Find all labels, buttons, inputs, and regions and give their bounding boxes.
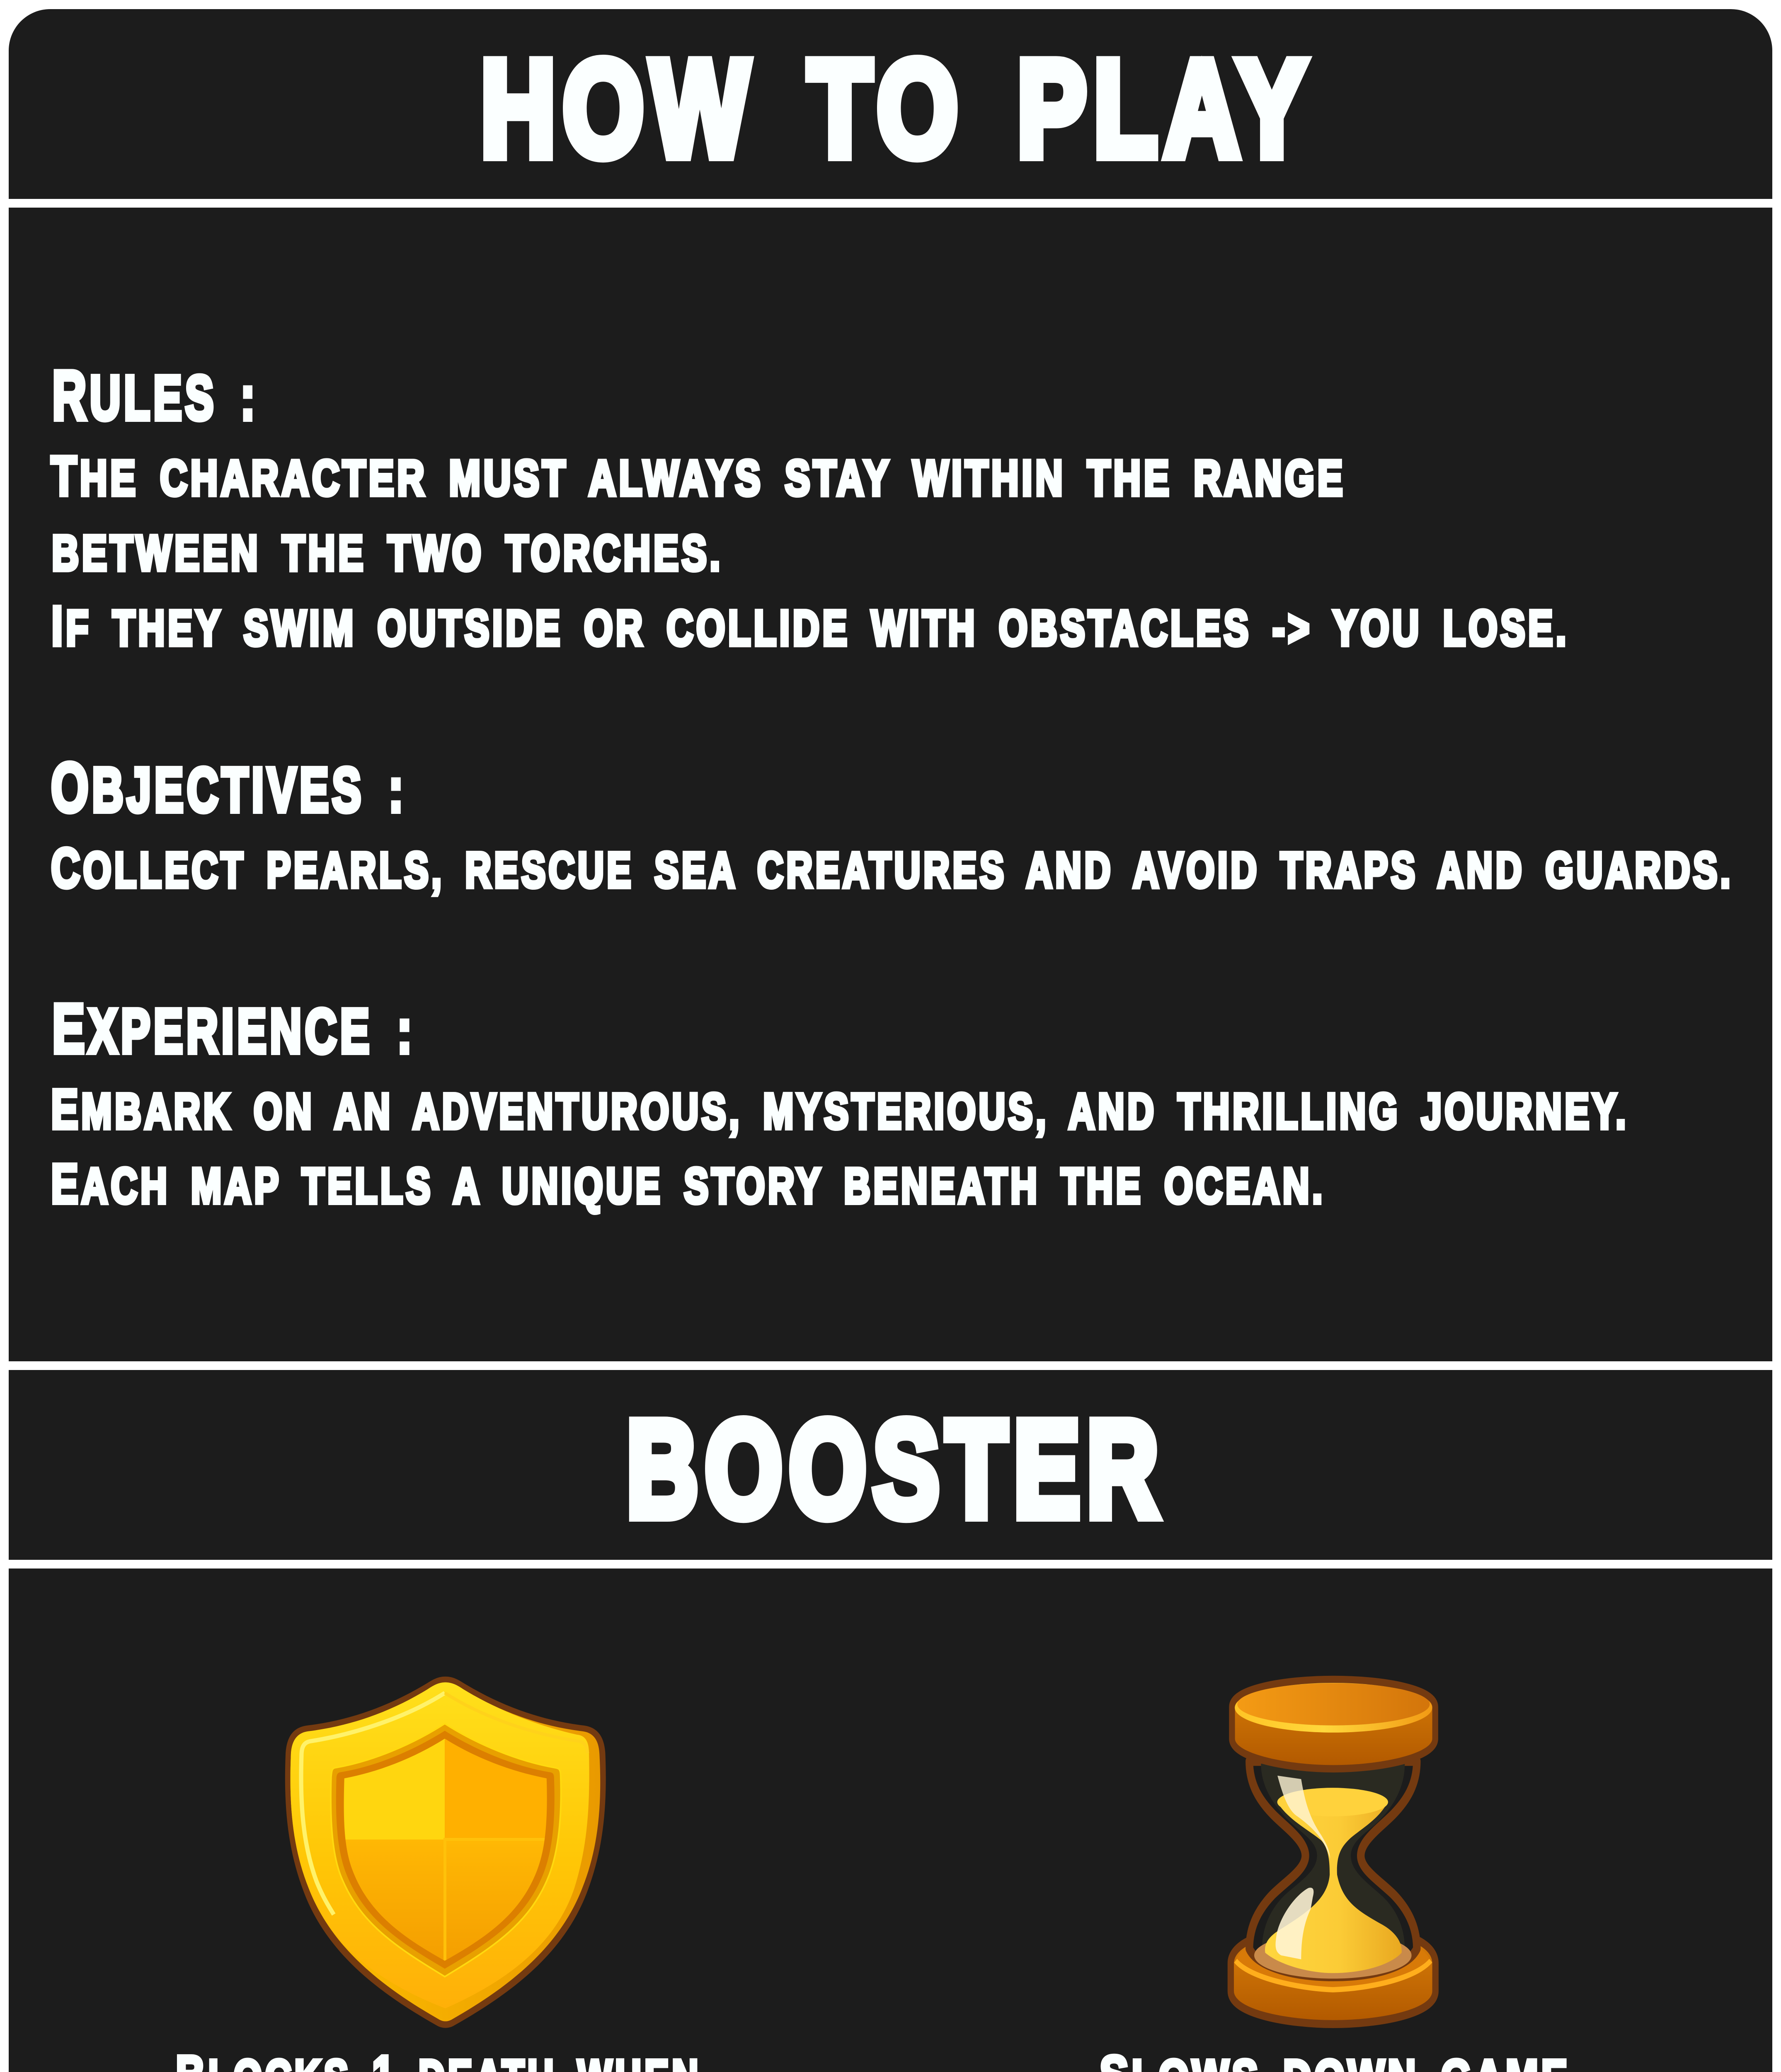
heading: objectives: OBJECTIVES : <box>51 748 407 826</box>
title: how to play: HOW TO PLAY <box>481 32 1314 184</box>
heading: rules: RULES : <box>52 356 258 434</box>
heading: booster: BOOSTER <box>627 1393 1166 1545</box>
panel: booster list <box>9 1569 1772 2072</box>
text block: rules <box>51 445 1569 657</box>
text block: experience: EACH MAP TELLS A UNIQUE STORY BENEATH THE OCEAN. <box>51 1152 1325 1215</box>
text block: rules: THE CHARACTER MUST ALWAYS STAY WITHIN THE RANGE <box>51 445 1346 507</box>
heading: experience: EXPERIENCE : <box>52 990 415 1067</box>
text block: experience <box>51 1078 1629 1215</box>
panel: how to play header <box>9 9 1772 199</box>
icon: shield <box>285 1677 606 2028</box>
text block: rules: BETWEEN THE TWO TORCHES. <box>52 525 723 581</box>
icon: hourglass <box>1234 1683 1432 2020</box>
panel: rules objectives experience <box>9 208 1772 1361</box>
panel: booster header <box>9 1370 1772 1560</box>
